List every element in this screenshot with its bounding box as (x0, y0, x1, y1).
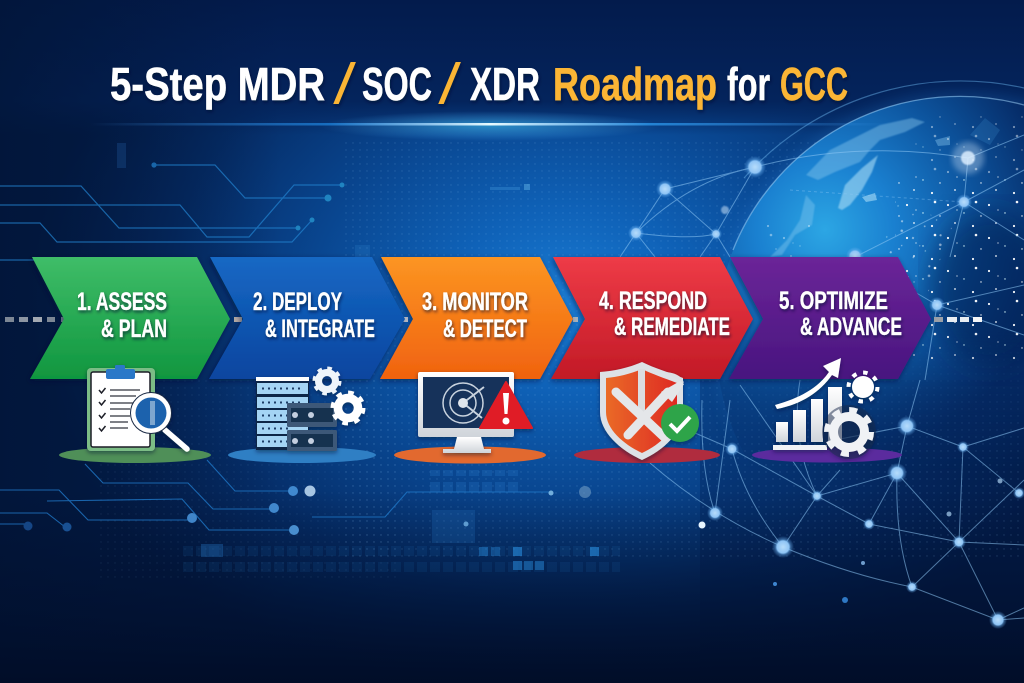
step 1 chevron (30, 257, 230, 379)
network lines (620, 135, 1024, 620)
step 1 chevron: 1. ASSESS (77, 288, 167, 316)
title: for (727, 58, 770, 110)
step 5 chevron: 5. OPTIMIZE (779, 287, 888, 315)
network nodes (628, 142, 1024, 629)
title: / (332, 52, 357, 115)
step 1 chevron: & PLAN (101, 315, 167, 343)
circuit traces lower left (0, 460, 620, 576)
step 5 chevron: & ADVANCE (800, 313, 902, 341)
step 3 chevron: & DETECT (443, 315, 527, 343)
title: Roadmap (553, 58, 717, 110)
title: GCC (780, 58, 848, 110)
step 4 chevron: & REMEDIATE (614, 313, 730, 341)
title: / (437, 52, 462, 115)
icon: growth chart with gears (752, 358, 902, 462)
title: 5-Step MDR (110, 58, 325, 110)
step 2 chevron: 2. DEPLOY (253, 288, 342, 316)
circuit traces upper left (0, 143, 530, 262)
title: SOC (362, 58, 432, 110)
step 4 chevron: 4. RESPOND (599, 287, 707, 315)
title: XDR (470, 58, 540, 110)
step 4 chevron (551, 257, 753, 379)
step 3 chevron: 3. MONITOR (422, 288, 528, 316)
step 2 chevron: & INTEGRATE (265, 315, 375, 343)
title (110, 52, 848, 115)
dashed connector (5, 317, 982, 322)
step 5 chevron (729, 257, 931, 379)
step 2 chevron (209, 257, 405, 379)
icon: monitor with target and warning (394, 372, 546, 464)
step 3 chevron (380, 257, 573, 379)
globe (720, 80, 1024, 438)
icon: shield with tools and check (574, 362, 720, 463)
glowing divider line (90, 111, 890, 141)
icon: servers and gears (228, 368, 376, 463)
icon: clipboard with magnifier (59, 365, 211, 463)
